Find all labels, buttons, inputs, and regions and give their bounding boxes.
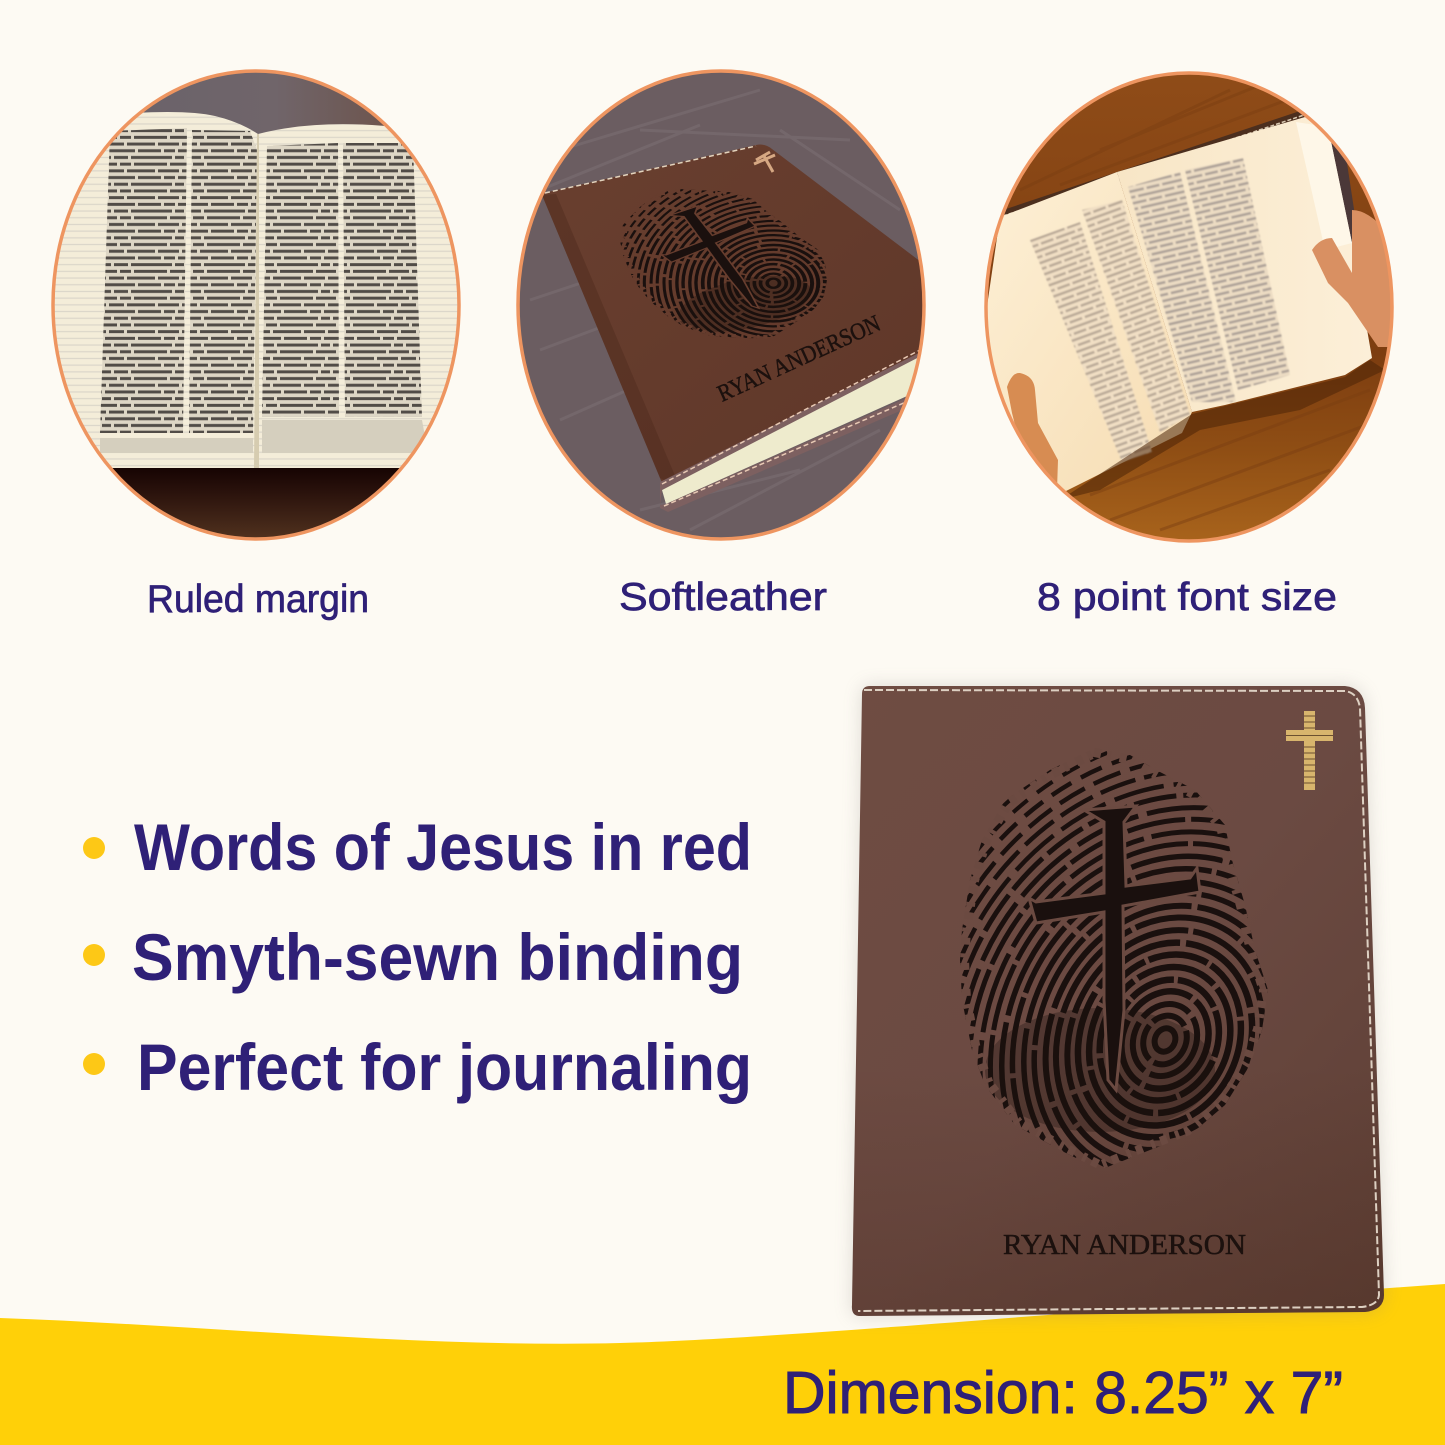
photo: softleather Bible cover (516, 69, 926, 541)
soft shadow (852, 686, 1384, 1316)
shadow under book (1060, 360, 1385, 500)
bullet: binding (83, 944, 105, 966)
bullet: words of Jesus (83, 837, 105, 859)
engraved name on small cover: RYAN ANDERSON (714, 311, 885, 407)
feature list (83, 810, 752, 1104)
caption: font size: 8 point font size (1037, 576, 1337, 619)
fingerprint and nail cross emblem (779, 627, 1445, 1445)
feature: words of Jesus in red: Words of Jesus in red (134, 810, 752, 884)
bullet: journaling (83, 1053, 105, 1075)
right hand (1312, 210, 1395, 347)
left hand (1007, 373, 1058, 490)
photo: open Bible with ruled margin (40, 70, 470, 541)
feature: smyth-sewn binding: Smyth-sewn binding (132, 920, 743, 994)
gold cross (1286, 711, 1333, 790)
yellow wave band (0, 1284, 1445, 1445)
small fingerprint emblem (620, 189, 827, 338)
caption: softleather: Softleather (619, 576, 827, 619)
main book cover (779, 627, 1445, 1445)
photo: 8 point font open Bible held in hands (985, 70, 1395, 545)
cover shape (852, 686, 1384, 1316)
feature: perfect for journaling: Perfect for journaling (137, 1030, 752, 1104)
caption: ruled margin: Ruled margin (147, 578, 369, 621)
dimension text: Dimension: 8.25” x 7” (783, 1360, 1343, 1426)
engraved name: RYAN ANDERSON (1003, 1230, 1246, 1261)
small gold cross (754, 152, 775, 172)
stitching (858, 690, 1379, 1311)
